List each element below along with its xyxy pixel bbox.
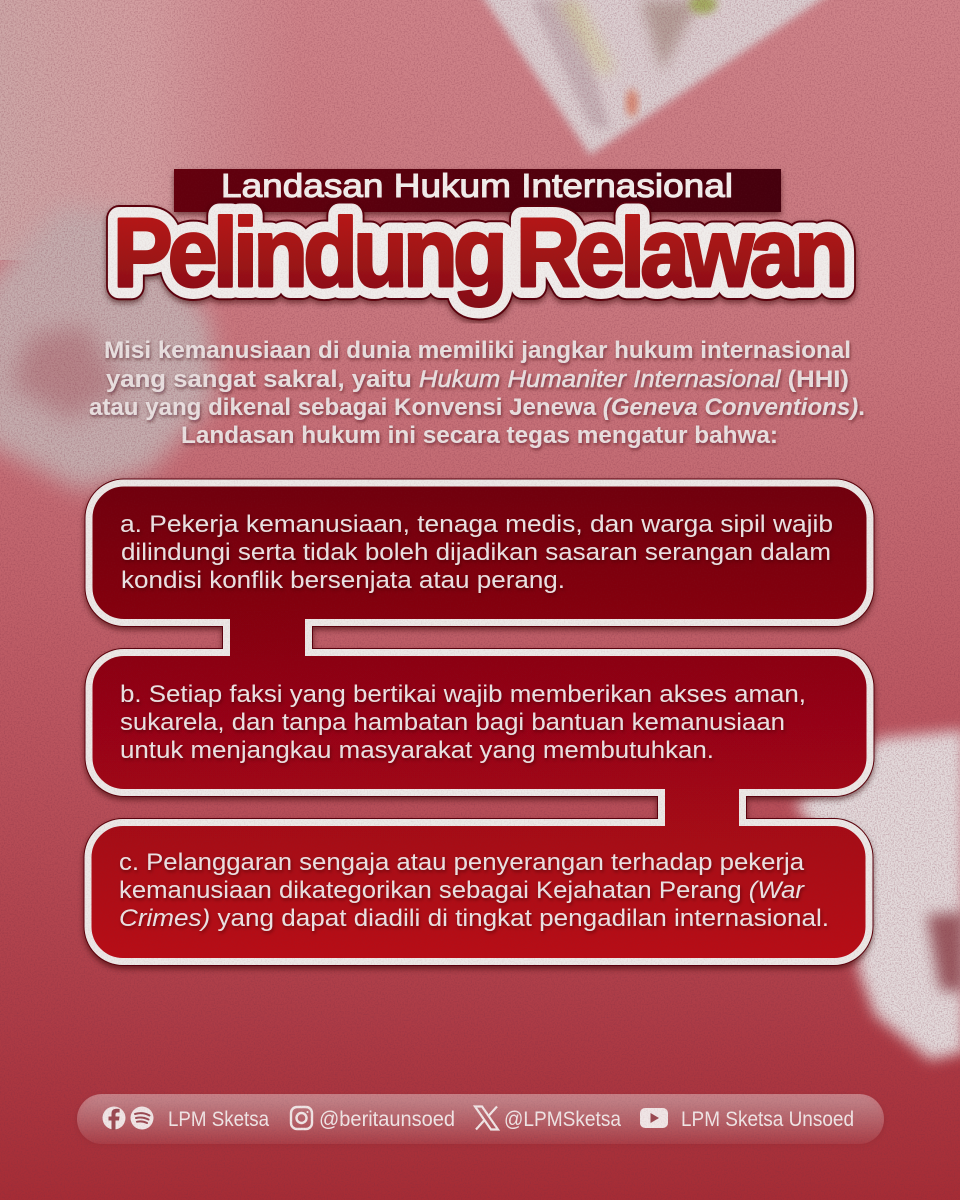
connected cards frame — [88, 483, 870, 962]
icon: facebook — [102, 1106, 126, 1130]
footer social bar — [77, 1094, 884, 1144]
label: LPM Sketsa: LPM Sketsa — [168, 1108, 269, 1131]
card b text: b. Setiap faksi yang bertikai wajib memberikan akses aman, — [120, 681, 806, 708]
icon: spotify — [130, 1106, 154, 1130]
icon: instagram — [291, 1107, 312, 1129]
intro paragraph: yang sangat sakral, yaitu Hukum Humaniter Internasional (HHI) — [106, 366, 849, 393]
label: @beritaunsoed: @beritaunsoed — [319, 1108, 455, 1131]
card c text: kemanusiaan dikategorikan sebagai Kejahatan Perang (War — [119, 877, 805, 904]
intro paragraph: atau yang dikenal sebagai Konvensi Jenewa (Geneva Conventions). — [89, 394, 865, 421]
card a text: dilindungi serta tidak boleh dijadikan sasaran serangan dalam — [121, 539, 831, 566]
title banner — [174, 168, 781, 212]
card a text: a. Pekerja kemanusiaan, tenaga medis, dan warga sipil wajib — [120, 511, 833, 538]
card a text: kondisi konflik bersenjata atau perang. — [121, 567, 565, 594]
title: Pelindung Relawan: Relawan — [516, 198, 844, 307]
card b text: sukarela, dan tanpa hambatan bagi bantuan kemanusiaan — [120, 709, 785, 736]
card b text — [120, 681, 806, 764]
intro paragraph: Misi kemanusiaan di dunia memiliki jangkar hukum internasional — [104, 337, 851, 364]
title: Pelindung Relawan: Pelindung — [113, 198, 503, 307]
card b text: untuk menjangkau masyarakat yang membutuhkan. — [120, 737, 714, 764]
label: LPM Sketsa Unsoed: LPM Sketsa Unsoed — [681, 1108, 854, 1131]
card c text: c. Pelanggaran sengaja atau penyerangan terhadap pekerja — [119, 849, 804, 876]
intro paragraph: Landasan hukum ini secara tegas mengatur bahwa: — [181, 422, 778, 449]
title: Pelindung Relawan — [113, 198, 844, 307]
title: Pelindung Relawan: Pelindung — [113, 198, 503, 307]
label: @LPMSketsa: @LPMSketsa — [504, 1108, 621, 1131]
title: Pelindung Relawan: Relawan — [516, 198, 844, 307]
title line 1: Landasan Hukum Internasional — [221, 168, 733, 205]
card a text — [120, 511, 833, 594]
title: Pelindung Relawan: Pelindung — [113, 198, 503, 307]
card c text — [119, 849, 829, 932]
icon: X — [475, 1106, 498, 1130]
card c text: Crimes) yang dapat diadili di tingkat pengadilan internasional. — [119, 905, 829, 932]
intro paragraph — [89, 337, 865, 449]
icon: youtube — [640, 1108, 668, 1128]
title: Pelindung Relawan: Relawan — [516, 198, 844, 307]
